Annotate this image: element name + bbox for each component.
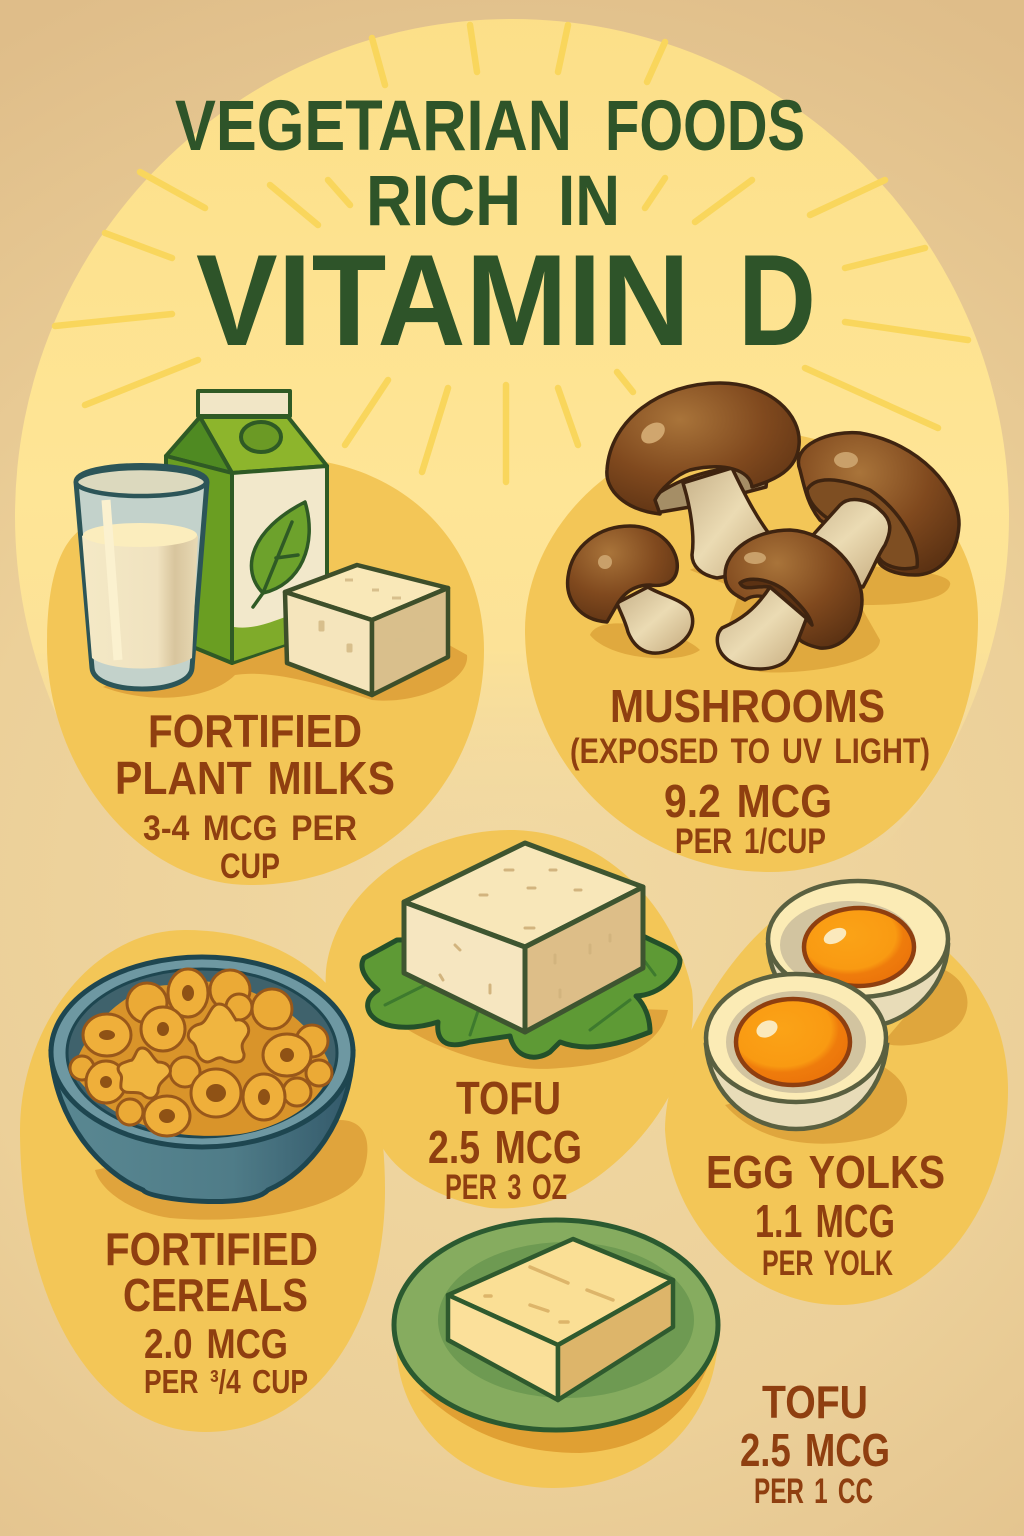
icon: lettuce leaves (362, 936, 680, 1057)
milk panel blob (47, 458, 484, 885)
egg label: 1.1 MCG (755, 1195, 895, 1247)
title: D (738, 227, 816, 373)
egg label: PER YOLK (762, 1244, 893, 1283)
icon: mushrooms (568, 383, 959, 669)
tofu label: TOFU (456, 1072, 561, 1124)
plate tofu label: TOFU (762, 1376, 868, 1428)
panel: egg yolks (665, 881, 1008, 1305)
milk label: PLANT MILKS (115, 752, 395, 804)
panel: fortified plant milks (47, 391, 484, 886)
mushroom: large centre (607, 383, 799, 578)
sun rays (55, 25, 968, 482)
egg panel blob (665, 905, 1008, 1305)
panel: tofu on plate (394, 1220, 890, 1511)
cereal label: FORTIFIED (105, 1223, 318, 1275)
mushroom label (570, 680, 930, 861)
mushroom label: PER 1/CUP (675, 822, 826, 861)
mushroom panel blob (525, 430, 978, 872)
cereal label: PER ³/4 CUP (144, 1363, 308, 1400)
panel: fortified cereals (20, 930, 385, 1432)
title: VITAMIN (196, 227, 690, 373)
icon: back egg (768, 881, 948, 1028)
icon: small tofu block (285, 565, 448, 695)
mushroom: front centre (717, 530, 862, 669)
milk label: FORTIFIED (148, 705, 362, 757)
cereal label: CEREALS (123, 1269, 308, 1321)
egg label (706, 1146, 945, 1283)
mushroom label: 9.2 MCG (664, 775, 832, 827)
tofu label: 2.5 MCG (428, 1121, 582, 1173)
icon: glass of milk (76, 466, 207, 689)
icon: cereal bowl (51, 957, 353, 1202)
panel: tofu on greens (326, 830, 693, 1208)
mushroom: large right (790, 433, 959, 587)
mushroom: small left (568, 526, 693, 653)
sun glow circle (15, 19, 1009, 1013)
panel: mushrooms (525, 383, 978, 872)
egg shadows (725, 970, 968, 1144)
plate tofu label: 2.5 MCG (740, 1424, 890, 1476)
tofu label: PER 3 OZ (445, 1168, 567, 1207)
cereal panel blob (20, 930, 385, 1432)
milk label (115, 705, 395, 886)
lettuce shadow (375, 1000, 668, 1069)
title (175, 87, 816, 373)
title: RICH (366, 162, 521, 241)
title: IN (558, 162, 620, 241)
icon: tofu block (404, 843, 643, 1032)
icon: green plate (394, 1220, 718, 1430)
shadow under milk items (103, 640, 467, 701)
title: FOODS (605, 87, 805, 166)
plate shadow (420, 1340, 716, 1453)
tofu label (428, 1072, 582, 1207)
milk label: 3-4 MCG PER (143, 809, 357, 848)
shadow under bowl (95, 1120, 367, 1220)
tofu panel blob (326, 830, 693, 1208)
plate tofu label (740, 1376, 890, 1511)
icon: front egg (706, 974, 887, 1129)
plate tofu label: PER 1 CC (754, 1472, 873, 1511)
shadows under mushrooms (590, 564, 950, 673)
egg label: EGG YOLKS (706, 1146, 945, 1198)
cereal label: 2.0 MCG (144, 1320, 288, 1367)
milk label: CUP (220, 847, 280, 886)
icon: plant milk carton (166, 391, 327, 663)
title: VEGETARIAN (175, 87, 572, 166)
mushroom label: MUSHROOMS (610, 680, 885, 732)
icon: plate tofu block (448, 1239, 673, 1400)
cereal label (105, 1223, 318, 1400)
cereal pieces (70, 969, 332, 1136)
plate panel blob (396, 1333, 718, 1488)
mushroom label: (EXPOSED TO UV LIGHT) (570, 732, 930, 771)
